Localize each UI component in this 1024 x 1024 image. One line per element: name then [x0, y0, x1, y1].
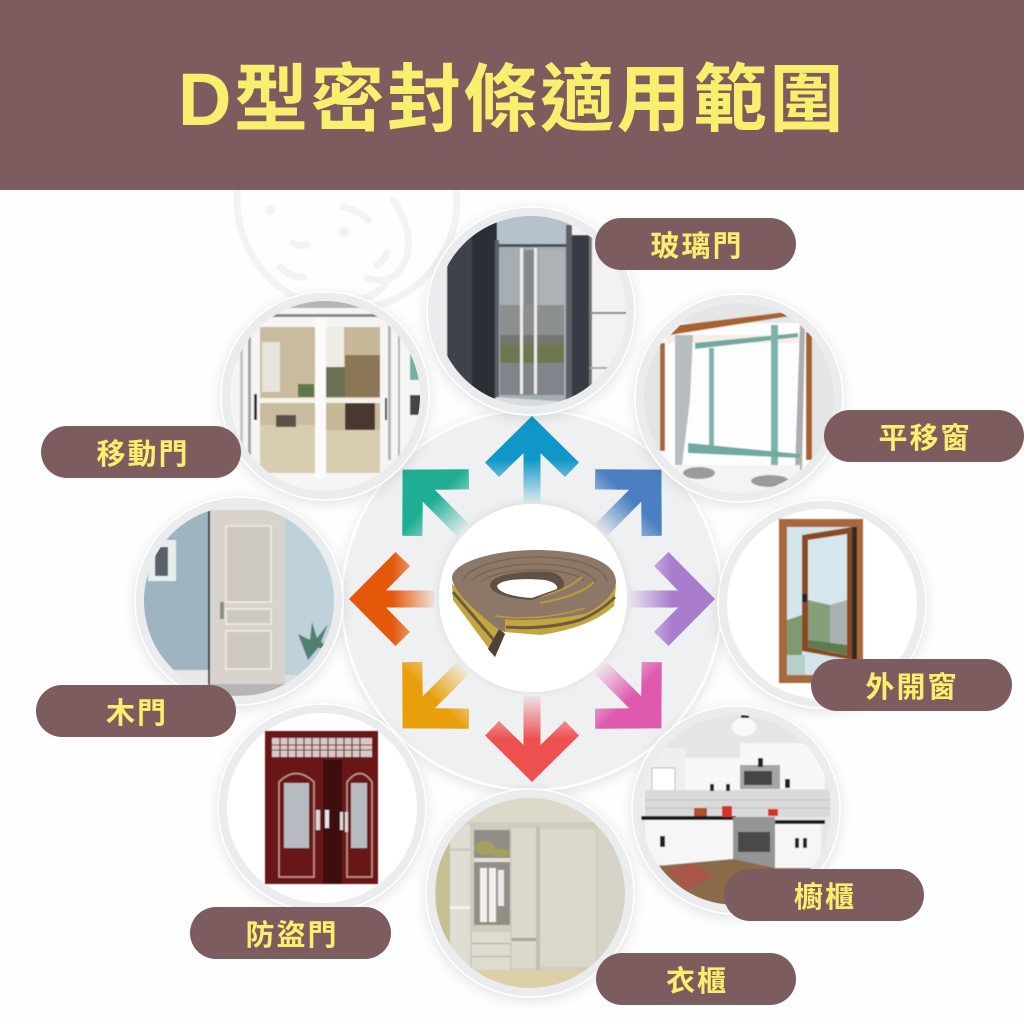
photo circle: wooden door [135, 497, 345, 705]
title: D型密封條適用範圍 [178, 58, 846, 141]
label: 玻璃門: 玻璃門 [650, 230, 744, 263]
watermark: cartoon face [234, 190, 460, 308]
label: 平移窗 [824, 410, 1024, 462]
kitchen photo [641, 715, 830, 904]
label: 平移窗: 平移窗 [878, 422, 972, 455]
wooden door photo [144, 510, 334, 696]
casement window photo [779, 519, 863, 683]
inner white circle [439, 504, 627, 692]
label: 木門: 木門 [106, 697, 168, 730]
eight coloured arrows [349, 416, 715, 782]
sliding window photo [659, 312, 813, 493]
label: 衣櫃: 衣櫃 [666, 965, 728, 998]
sliding door photo [230, 300, 422, 495]
label: 櫥櫃: 櫥櫃 [794, 881, 856, 914]
photo circle: wardrobe [426, 789, 635, 997]
central hub circle [342, 410, 722, 790]
label: 防盜門: 防盜門 [245, 919, 339, 952]
label: 木門 [36, 685, 236, 737]
photo circle: casement window [718, 500, 926, 708]
label: 櫥櫃 [724, 869, 924, 921]
label: 衣櫃 [596, 953, 796, 1005]
label: 外開窗 [811, 659, 1012, 711]
header band [0, 0, 1024, 190]
label: 移動門: 移動門 [96, 438, 190, 471]
wardrobe photo [435, 798, 625, 988]
label: 防盜門 [190, 907, 391, 959]
glass door photo [446, 216, 626, 406]
photo circle: glass door [427, 207, 640, 420]
product: coiled D-shaped seal strip [452, 550, 616, 657]
photo circle: kitchen cabinets [630, 706, 840, 920]
photo circle: security door [218, 704, 426, 912]
security door photo [265, 731, 378, 884]
photo circle: sliding door [221, 292, 429, 500]
label: 外開窗: 外開窗 [865, 671, 959, 704]
label: 移動門 [41, 426, 241, 478]
label: 玻璃門 [595, 218, 796, 270]
photo circle: sliding window [635, 294, 843, 502]
